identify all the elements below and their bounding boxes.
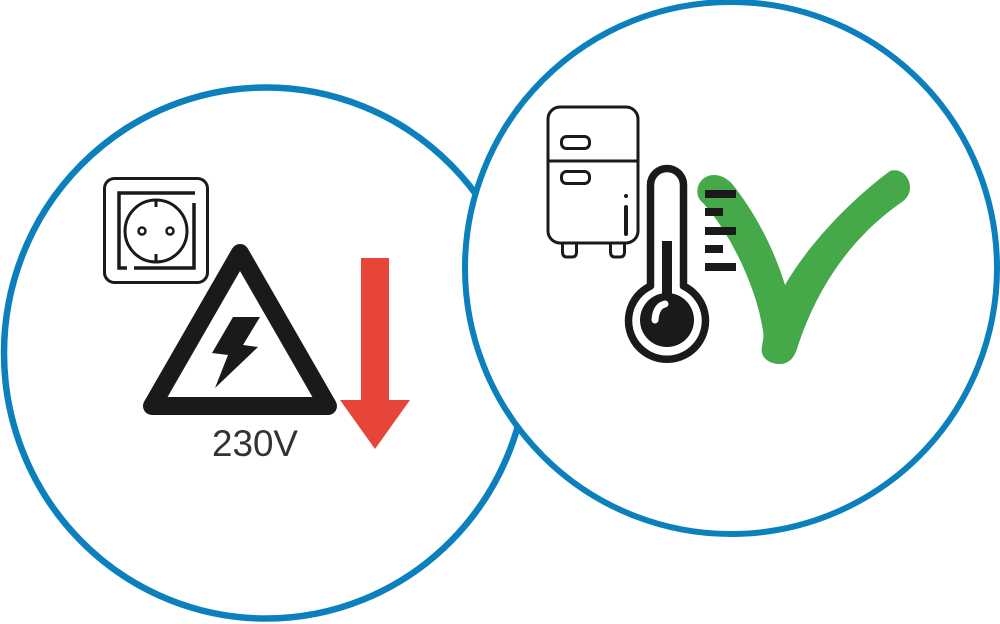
- icon: thermometer: [628, 169, 706, 359]
- icon: refrigerator: [548, 107, 638, 257]
- panel: right circle, temperature: [465, 2, 997, 534]
- icon: thermometer scale ticks: [705, 190, 736, 271]
- icon: high voltage warning triangle: [152, 253, 328, 406]
- text: voltage label: 230V: [212, 423, 298, 464]
- icon: green check mark: [697, 170, 910, 364]
- arrow: red down arrow: [340, 258, 410, 449]
- icon: wall socket: [104, 178, 208, 282]
- panel: left circle, voltage: [4, 88, 528, 618]
